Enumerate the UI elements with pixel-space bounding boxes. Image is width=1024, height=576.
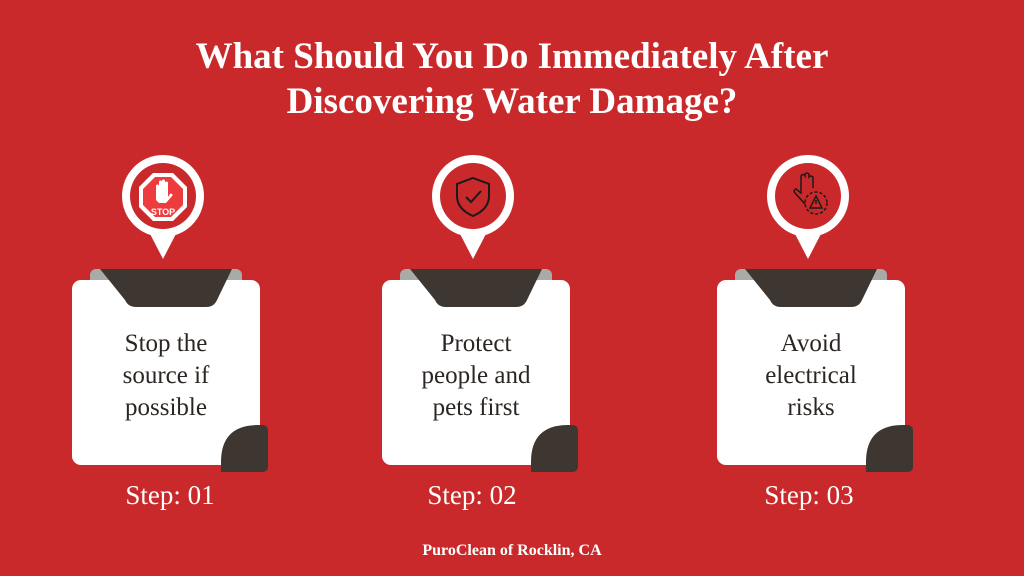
- icon: stop sign: [139, 173, 187, 221]
- icon: shield check: [457, 178, 489, 216]
- icon: hand with warning gear: [794, 173, 827, 214]
- card text 1: source if: [123, 362, 209, 389]
- card text 1: possible: [125, 394, 207, 421]
- step 2: Step: 02: [427, 480, 517, 510]
- card 1: [72, 155, 268, 472]
- card text 3: risks: [787, 394, 835, 421]
- step 1: Step: 01: [125, 480, 215, 510]
- card 2: [382, 155, 578, 472]
- card 3: [717, 155, 913, 472]
- card text 2: Protect: [441, 330, 511, 357]
- card text 1: [123, 330, 210, 421]
- title: [196, 36, 828, 122]
- card text 2: pets first: [433, 394, 519, 421]
- card text 2: people and: [422, 362, 530, 389]
- card text 1: Stop the: [125, 330, 207, 357]
- card text 3: Avoid: [781, 330, 841, 357]
- card text 2: [422, 330, 530, 421]
- card text 3: [765, 330, 857, 421]
- footer: PuroClean of Rocklin, CA: [422, 542, 602, 559]
- card text 3: electrical: [765, 362, 857, 389]
- step 3: Step: 03: [764, 480, 854, 510]
- icon: stop sign: STOP: [151, 207, 175, 217]
- title: Discovering Water Damage?: [287, 81, 737, 122]
- title: What Should You Do Immediately After: [196, 36, 828, 77]
